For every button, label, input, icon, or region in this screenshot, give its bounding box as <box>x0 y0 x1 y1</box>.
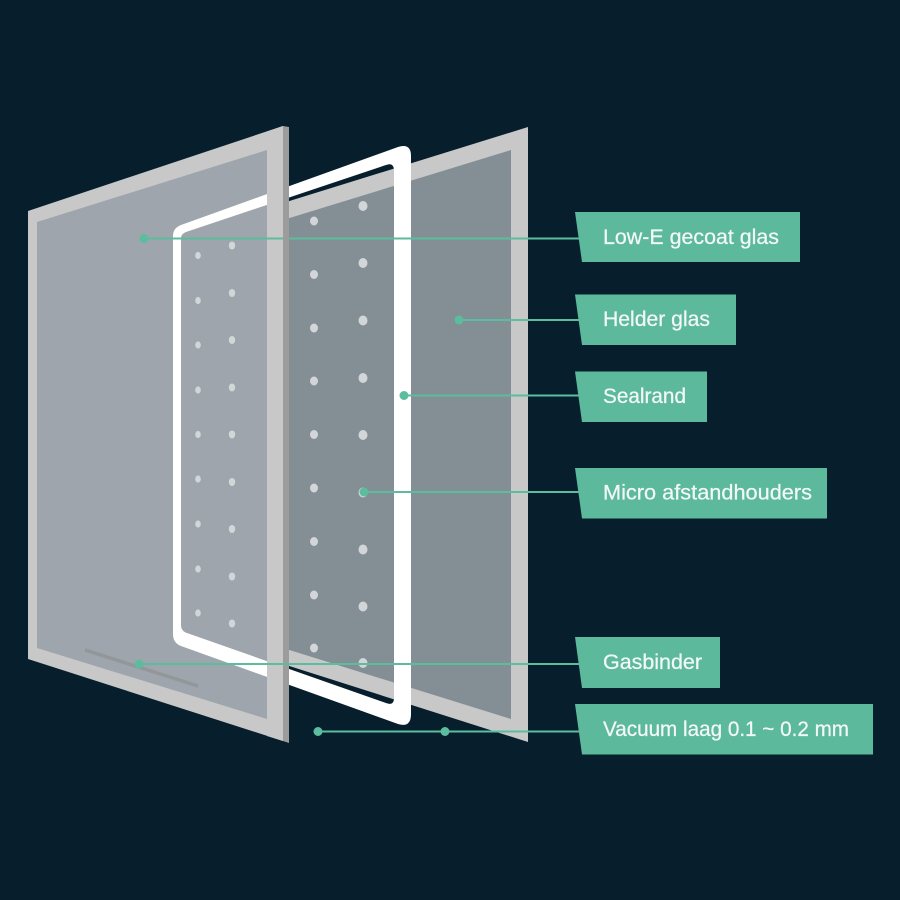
getter strip <box>85 650 198 686</box>
panel: back clear glass pane <box>283 127 528 742</box>
micro spacers on back pane <box>310 201 368 668</box>
leader: Sealrand <box>400 391 580 400</box>
front pane right frame edge <box>267 126 289 743</box>
label: Micro afstandhouders <box>575 468 827 518</box>
seal edge frame <box>173 146 411 725</box>
label: Sealrand: Sealrand <box>603 385 686 408</box>
label: Micro afstandhouders: Micro afstandhouders <box>603 482 812 504</box>
panel: front Low-E coated glass pane <box>28 126 283 741</box>
label: Sealrand <box>575 372 707 422</box>
label: Low-E gecoat glas <box>575 212 800 262</box>
leader: Vacuum laag <box>314 727 580 736</box>
label: Vacuum laag 0.1 ~ 0.2 mm: Vacuum laag 0.1 ~ 0.2 mm <box>603 718 849 741</box>
label: Helder glas: Helder glas <box>603 308 710 331</box>
label: Gasbinder <box>575 637 720 688</box>
label: Vacuum laag 0.1 ~ 0.2 mm <box>575 704 873 754</box>
label: Low-E gecoat glas: Low-E gecoat glas <box>603 226 779 249</box>
label: Helder glas <box>575 294 736 345</box>
leader: Gasbinder <box>134 660 580 668</box>
leader: Low-E gecoat glas <box>140 234 580 243</box>
label: Gasbinder: Gasbinder <box>603 651 702 674</box>
micro spacers seen through front pane <box>195 242 235 628</box>
leader: Micro afstandhouders <box>360 488 580 496</box>
leader: Helder glas <box>454 316 580 324</box>
